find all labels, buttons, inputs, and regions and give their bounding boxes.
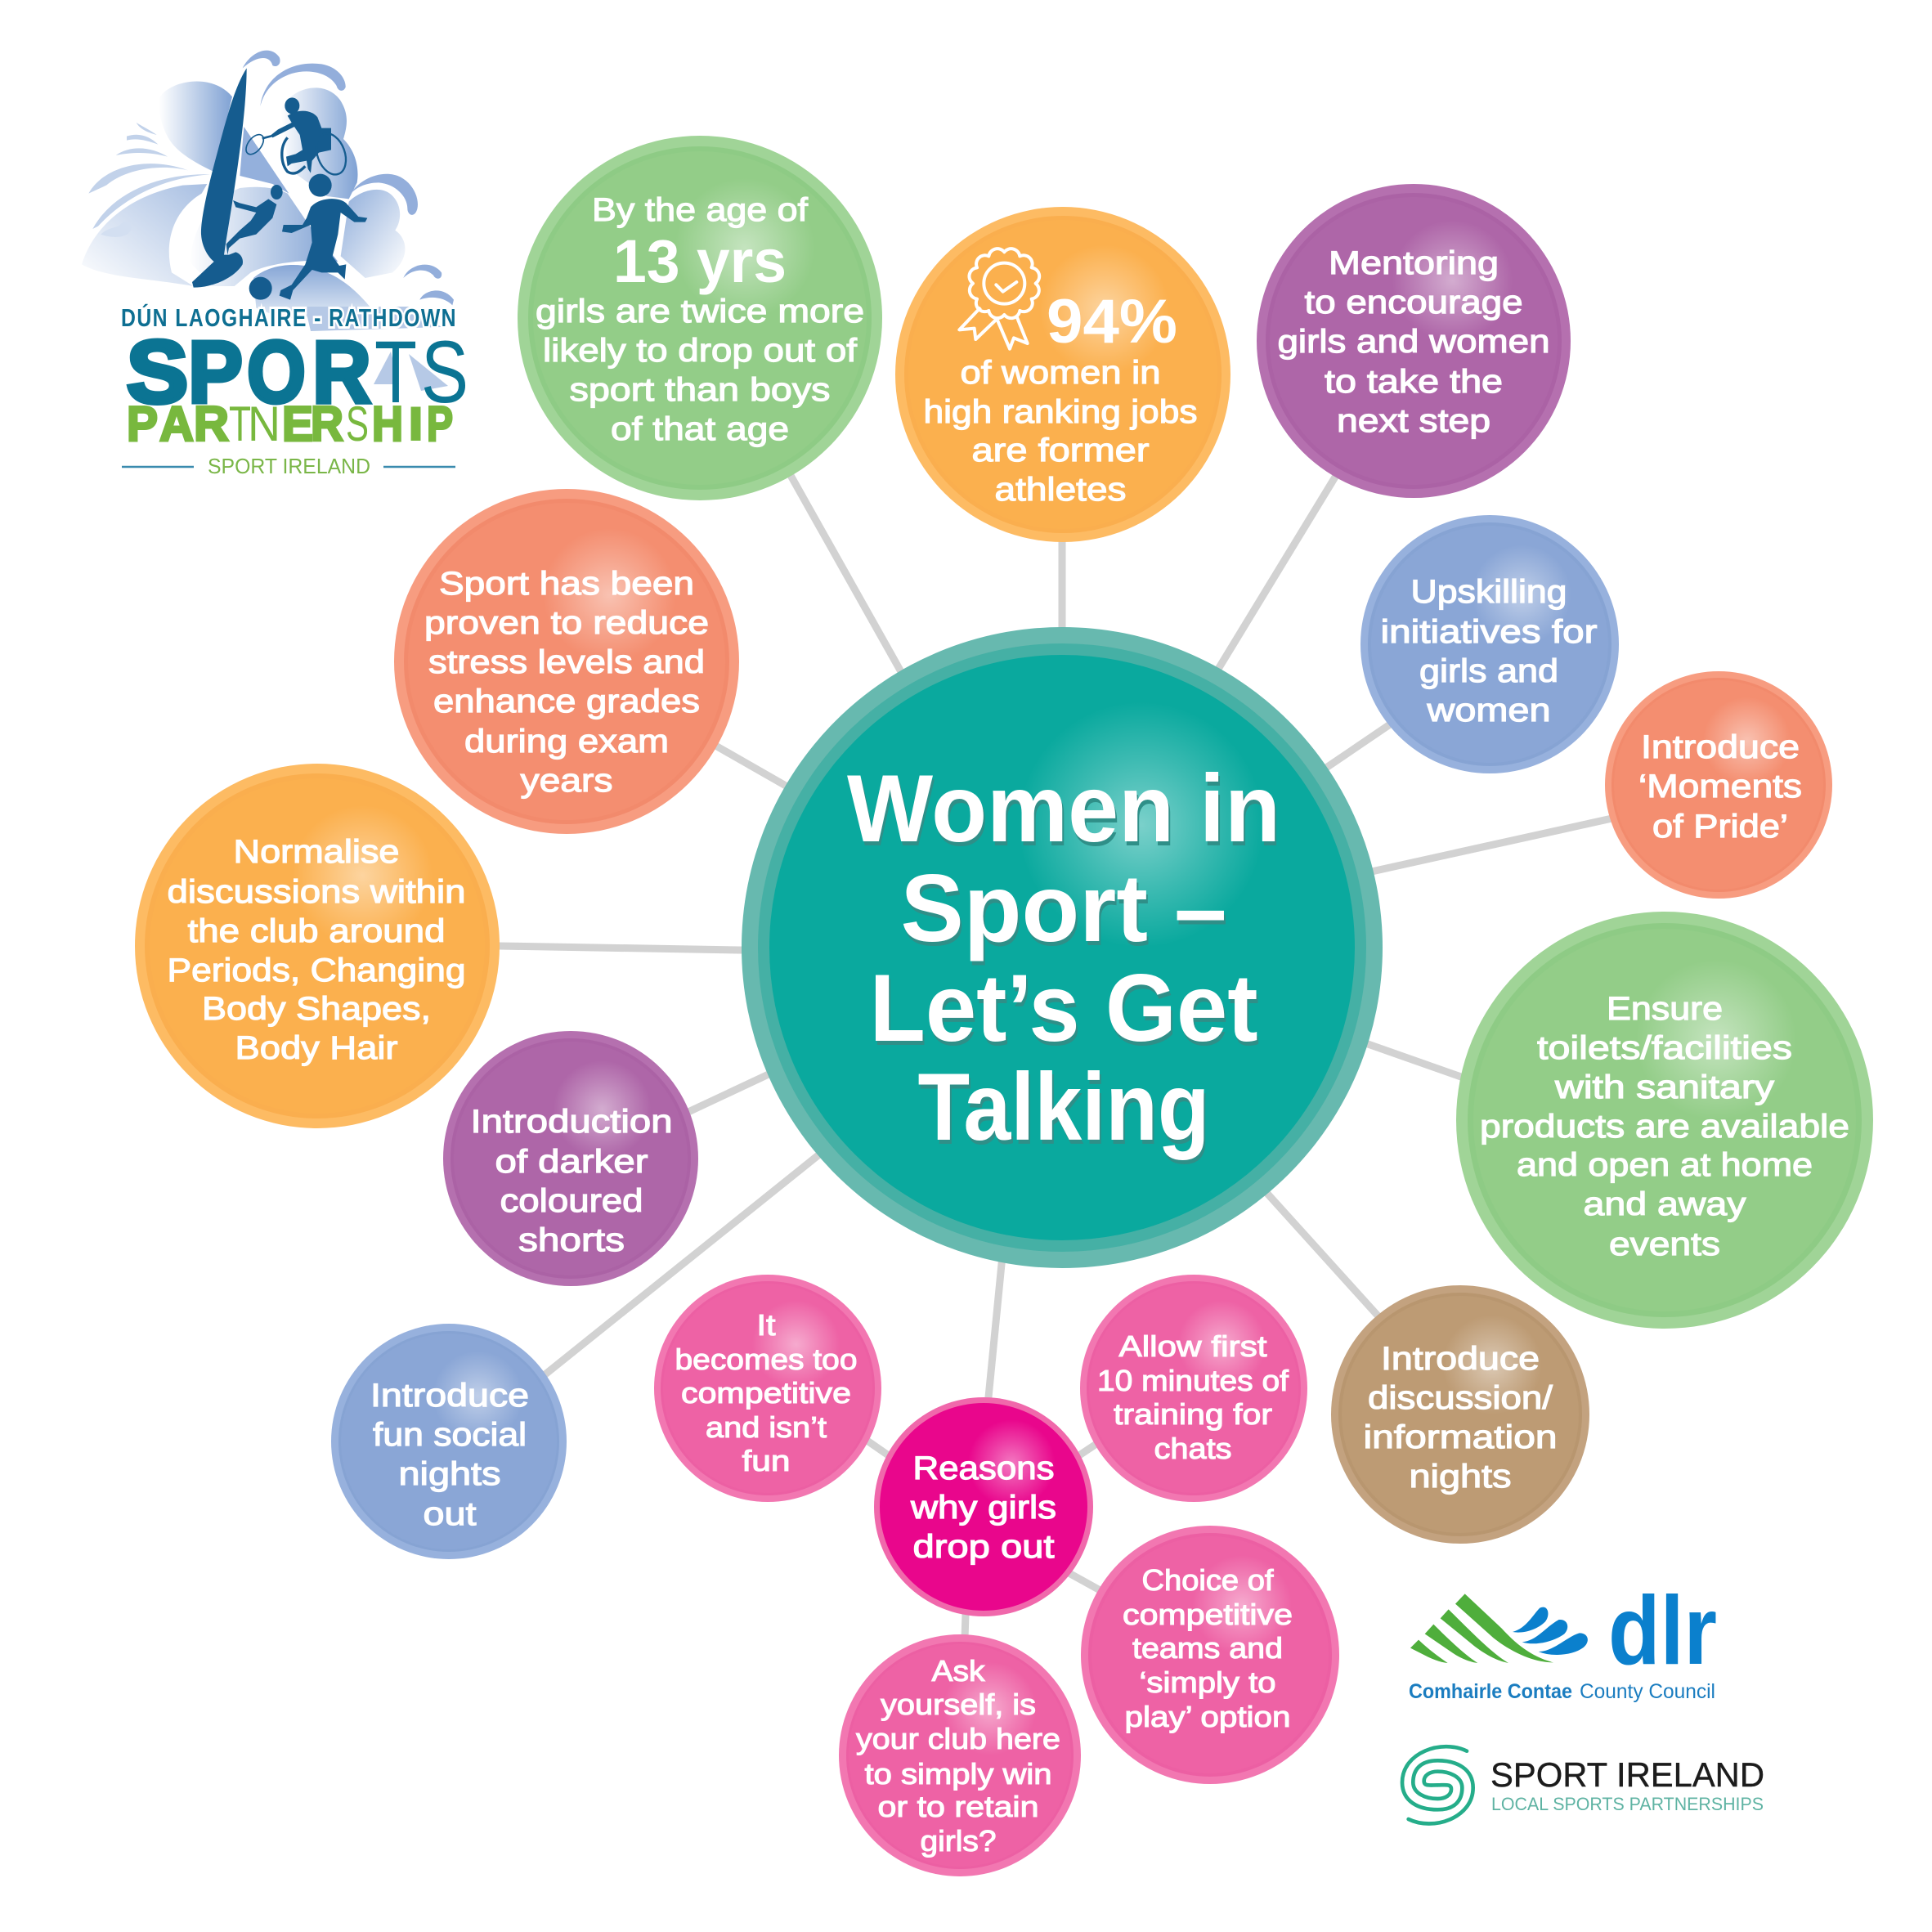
text: mentoring: next step [1337,403,1490,439]
text: first 10 minutes [1097,1329,1289,1465]
bubble: first 10 minutes [1080,1275,1307,1502]
text: information nights: Introduce [1381,1341,1540,1377]
logo text: Partnership: R [311,397,343,451]
bubble: social nights [331,1324,567,1559]
logo text: Partnership: P [127,397,158,451]
text: toilets and facilities: events [1609,1226,1720,1262]
bubble: darker shorts [443,1031,698,1286]
logo text: Sport Ireland: SPORT IRELAND [208,454,370,478]
logo: dlr County Council [1409,1576,1717,1703]
bubble: 13 yrs statistic [518,136,882,500]
text: choice of teams: play’ option [1125,1700,1290,1733]
text: 13 yrs statistic: 13 yrs [613,227,787,295]
logo text: Dun Laoghaire Rathdown: DÚN LAOGHAIRE - RATHDOWN [121,303,456,332]
logo text: Sports: S [127,322,188,421]
text: 13 yrs statistic: girls are twice more [536,294,864,329]
text: normalise discussions: Body Hair [235,1030,397,1066]
text: normalise discussions: Body Shapes, [202,991,431,1027]
text: social nights: out [424,1496,476,1532]
bubble: ask yourself [839,1634,1081,1876]
logo text: Partnership: I [406,397,425,451]
text: mentoring [1277,245,1550,439]
icon: award rosette [959,249,1039,349]
logo text: Comhairle Contae County Council: Comhairle Contae [1409,1680,1572,1703]
bubble: normalise discussions [135,764,500,1128]
text: darker shorts: Introduction [471,1104,672,1140]
logo text: Partnership: R [194,397,229,451]
text: stress and grades: during exam [464,724,669,760]
bubble: toilets and facilities [1456,912,1873,1329]
text: choice of teams: teams and [1132,1631,1283,1665]
text: upskilling: initiatives for [1380,614,1598,650]
text: toilets and facilities: and away [1583,1186,1746,1222]
text: mentoring: girls and women [1277,324,1550,360]
text: 13 yrs statistic: sport than boys [569,372,831,408]
title: Talking [917,1053,1210,1160]
logo text: Partnership: S [346,397,369,451]
text: mentoring: to encourage [1305,285,1522,321]
text: toilets and facilities: toilets/facilities [1537,1030,1792,1066]
bubble: mentoring [1257,184,1571,498]
text: darker shorts [471,1104,672,1258]
text: upskilling: Upskilling [1411,574,1567,610]
bubble: upskilling [1360,515,1619,773]
text: ask yourself: yourself, is [881,1688,1036,1721]
title: Women in [847,755,1280,862]
text: too competitive: It [757,1308,775,1342]
text: social nights [370,1378,529,1532]
logo text: Local Sports Partnerships: LOCAL SPORTS PARTNERSHIPS [1491,1794,1764,1814]
text: normalise discussions: discussions within [167,874,466,910]
text: toilets and facilities: and open at home [1517,1147,1813,1183]
text: first 10 minutes: Allow first [1118,1329,1267,1363]
logo text: Sports: S [421,322,468,421]
logo text: Comhairle Contae County Council: County Council [1580,1680,1715,1703]
text: upskilling: girls and [1419,653,1558,689]
text: ask yourself: girls? [921,1824,996,1858]
logo text: Sports: R [312,322,371,421]
logo text: Partnership: H [372,397,403,451]
text: reasons why girls drop out [910,1450,1056,1565]
title shadow: Let’s Get [872,958,1259,1065]
text: stress and grades: Sport has been [439,566,694,602]
text: normalise discussions: Normalise [234,834,399,870]
text: first 10 minutes: 10 minutes of [1097,1364,1289,1397]
text: stress and grades: years [520,763,613,799]
text: ask yourself: your club here [856,1722,1060,1755]
logo text: dlr: dlr [1608,1576,1717,1685]
text: first 10 minutes: chats [1154,1432,1231,1465]
text: ask yourself: Ask [932,1654,986,1688]
text: social nights: nights [399,1456,500,1492]
logo text: Partnership: T [229,397,251,451]
central bubble: title [742,627,1383,1268]
logo text: Sports: P [188,322,243,421]
text: moments of pride: of Pride’ [1652,809,1788,845]
text: darker shorts: coloured [500,1183,643,1219]
text: 94% statistic: of women in [960,355,1161,391]
text: normalise discussions [167,834,466,1066]
text: darker shorts: of darker [495,1144,648,1180]
logo text: Partnership: A [159,397,194,451]
logo text: Comhairle Contae County Council [1409,1680,1715,1703]
text: 13 yrs statistic: likely to drop out of [543,333,858,369]
text: 13 yrs statistic: By the age of [592,192,809,228]
text: reasons why girls drop out: drop out [912,1529,1055,1565]
text: ask yourself: or to retain [878,1790,1038,1823]
bubble: 94% statistic [895,207,1230,542]
text: 94% statistic: are former [971,433,1150,468]
text: toilets and facilities [1480,991,1849,1262]
text: upskilling [1380,574,1598,728]
text: 94% statistic: 94% [1047,287,1177,356]
text: information nights: nights [1410,1459,1511,1495]
text: information nights [1364,1341,1557,1495]
title: Let’s Get [870,954,1257,1061]
text: social nights: fun social [373,1417,527,1453]
text: mentoring: to take the [1325,364,1503,400]
logo artwork: waves and athletes [82,51,454,319]
text: reasons why girls drop out: Reasons [912,1450,1055,1486]
title shadow: Women in [849,759,1282,866]
logo text: Sports: O [247,322,306,421]
text: 13 yrs statistic [536,192,864,447]
bubble: choice of teams [1081,1526,1339,1784]
text: too competitive [675,1308,857,1477]
title shadow: Talking [919,1057,1212,1164]
title: Sport – [901,854,1226,962]
text: stress and grades: proven to reduce [424,605,709,641]
logo: Sport Ireland Local Sports Partnerships [1402,1746,1764,1823]
text: first 10 minutes: training for [1114,1397,1272,1431]
bubble: information nights [1331,1285,1589,1544]
logo: Dun Laoghaire-Rathdown Sports Partnership [82,51,468,478]
text: too competitive: fun [742,1444,790,1477]
bubble: stress and grades [394,489,739,834]
text: normalise discussions: Periods, Changing [167,953,466,988]
text: too competitive: and isn’t [706,1410,827,1444]
text: moments of pride: Introduce [1641,729,1800,765]
text: 94% statistic: high ranking jobs [924,394,1197,430]
text: moments of pride [1638,729,1802,845]
text: 13 yrs statistic: of that age [611,411,789,447]
connector lines [499,478,1608,1638]
text: reasons why girls drop out: why girls [910,1490,1056,1526]
text: moments of pride: ‘Moments [1638,769,1802,805]
logo text: Sports: T [374,322,417,421]
text: choice of teams: Choice of [1141,1563,1275,1597]
text: upskilling: women [1426,693,1550,728]
text: information nights: discussion/ [1368,1380,1553,1416]
bubble: too competitive [654,1275,881,1502]
logo text: Sport Ireland: SPORT IRELAND [1490,1755,1764,1794]
text: 94% statistic [924,287,1197,508]
text: 94% statistic: athletes [994,472,1127,508]
text: choice of teams: ‘simply to [1140,1665,1275,1699]
text: normalise discussions: the club around [188,913,445,949]
text: choice of teams [1123,1563,1293,1733]
logo text: Partnership: P [427,397,453,451]
logo text: Partnership: E [282,397,313,451]
text: ask yourself [856,1654,1060,1858]
text: toilets and facilities: with sanitary [1554,1069,1774,1105]
text: toilets and facilities: products are available [1480,1109,1849,1145]
logo wave fragment behind lettering [305,307,448,391]
text: choice of teams: competitive [1123,1598,1293,1631]
title shadow [849,759,1282,1164]
text: too competitive: competitive [681,1376,851,1410]
text: social nights: Introduce [370,1378,529,1414]
icon: dlr hills and waves [1410,1594,1588,1663]
logo text: Partnership: N [248,397,280,451]
title [847,755,1280,1160]
text: too competitive: becomes too [675,1343,857,1376]
text: information nights: information [1364,1419,1557,1455]
bubble: moments of pride [1605,671,1832,899]
text: stress and grades: stress levels and [428,644,705,680]
text: stress and grades [424,566,709,799]
text: toilets and facilities: Ensure [1607,991,1723,1027]
title shadow: Sport – [903,858,1228,966]
text: ask yourself: to simply win [865,1757,1051,1791]
text: darker shorts: shorts [518,1222,625,1258]
icon: Sport Ireland spiral [1402,1746,1473,1823]
text: mentoring: Mentoring [1329,245,1499,281]
bubble: reasons why girls drop out [874,1397,1093,1616]
text: stress and grades: enhance grades [433,684,700,719]
